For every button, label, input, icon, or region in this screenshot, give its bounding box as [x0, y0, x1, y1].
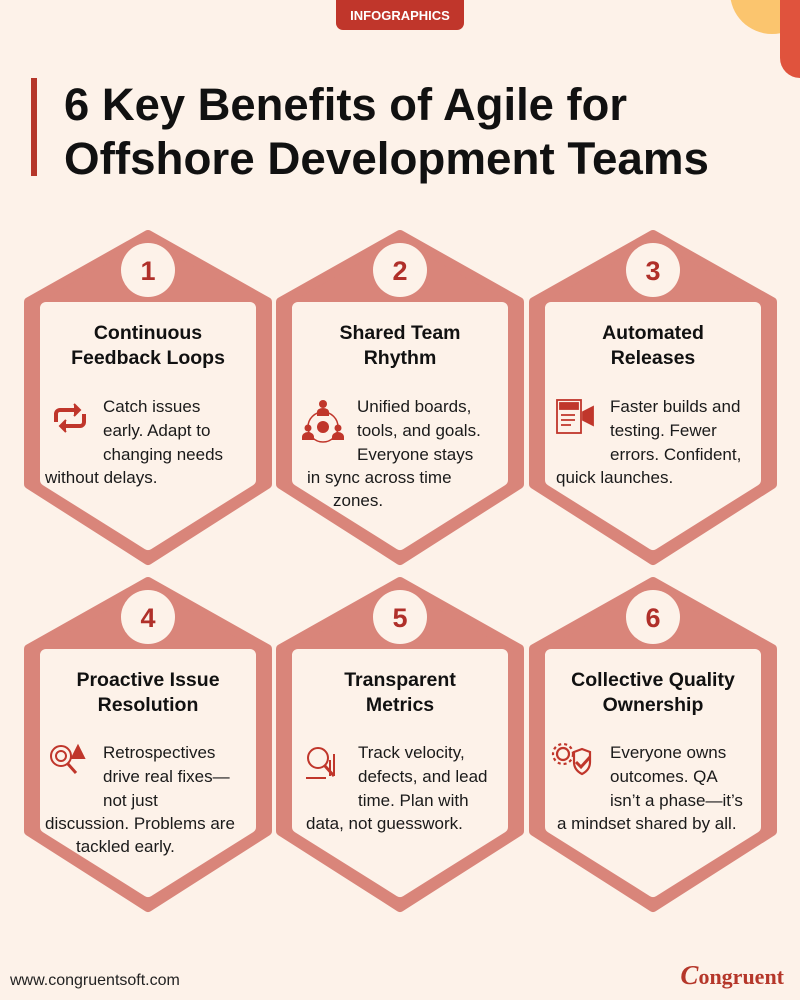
- card 2: shared team rhythm: 2: [392, 256, 408, 286]
- card 5: transparent metrics: [281, 582, 519, 907]
- card 6: collective quality ownership: a mindset shared by all.: [557, 814, 737, 833]
- card 3: automated releases: errors. Confident,: [610, 445, 741, 464]
- card 6: collective quality ownership: [534, 582, 772, 907]
- title: Offshore Development Teams: [64, 133, 709, 184]
- card 3: automated releases: Releases: [611, 347, 695, 369]
- icon: loop arrows: [56, 404, 84, 432]
- card 2: shared team rhythm: Rhythm: [364, 347, 436, 369]
- card 1: continuous feedback loops: 1: [140, 256, 156, 286]
- card 4: proactive issue resolution: Retrospectives: [103, 743, 215, 762]
- icon: team: [302, 400, 344, 442]
- card 4: proactive issue resolution: tackled early.: [76, 837, 175, 856]
- card 3: automated releases: [534, 235, 772, 560]
- card 3: automated releases: 3: [645, 256, 661, 286]
- card 4: proactive issue resolution: Proactive Issue: [76, 669, 220, 691]
- card 5: transparent metrics: time. Plan with: [358, 791, 469, 810]
- card 4: proactive issue resolution: 4: [140, 603, 156, 633]
- card 4: proactive issue resolution: discussion. Problems are: [45, 814, 235, 833]
- card 3: automated releases: Faster builds and: [610, 397, 740, 416]
- card 5: transparent metrics: 5: [392, 603, 408, 633]
- card 1: continuous feedback loops: early. Adapt to: [103, 421, 210, 440]
- footer: website: www.congruentsoft.com: [9, 972, 180, 989]
- card 2: shared team rhythm: Everyone stays: [357, 445, 473, 464]
- icon: chart magnifier: [306, 748, 334, 778]
- card 1: continuous feedback loops: Continuous: [94, 322, 202, 344]
- card 5: transparent metrics: defects, and lead: [358, 767, 487, 786]
- card 5: transparent metrics: Transparent: [344, 669, 456, 691]
- title: [31, 78, 709, 184]
- card 4: proactive issue resolution: Resolution: [98, 694, 198, 716]
- card 5: transparent metrics: data, not guesswork.: [306, 814, 463, 833]
- card 1: continuous feedback loops: Feedback Loops: [71, 347, 225, 369]
- card 6: collective quality ownership: Ownership: [603, 694, 703, 716]
- card 5: transparent metrics: Track velocity,: [358, 743, 465, 762]
- card 6: collective quality ownership: outcomes. QA: [610, 767, 718, 786]
- card 2: shared team rhythm: tools, and goals.: [357, 421, 481, 440]
- card 6: collective quality ownership: isn’t a phase—it’s: [610, 791, 743, 810]
- card 2: shared team rhythm: Unified boards,: [357, 397, 471, 416]
- card 1: continuous feedback loops: without delays.: [44, 468, 157, 487]
- card 6: collective quality ownership: Collective Quality: [571, 669, 735, 691]
- card 3: automated releases: quick launches.: [556, 468, 673, 487]
- icon: gear with shield check: [553, 744, 590, 774]
- card 5: transparent metrics: Metrics: [366, 694, 434, 716]
- card 4: proactive issue resolution: not just: [103, 791, 158, 810]
- card 2: shared team rhythm: zones.: [333, 491, 383, 510]
- card 6: collective quality ownership: Everyone owns: [610, 743, 726, 762]
- card 2: shared team rhythm: in sync across time: [307, 468, 452, 487]
- card 3: automated releases: testing. Fewer: [610, 421, 717, 440]
- card 1: continuous feedback loops: Catch issues: [103, 397, 200, 416]
- card 2: shared team rhythm: [281, 235, 519, 560]
- badge: infographics: INFOGRAPHICS: [350, 8, 450, 23]
- footer: logo: Congruent: [680, 960, 785, 990]
- icon: release document with megaphone: [557, 400, 593, 433]
- card 4: proactive issue resolution: [29, 582, 267, 907]
- card 6: collective quality ownership: 6: [645, 603, 661, 633]
- card 1: continuous feedback loops: [29, 235, 267, 560]
- card 3: automated releases: Automated: [602, 322, 704, 344]
- card 1: continuous feedback loops: changing needs: [103, 445, 223, 464]
- decoration: corner shapes: [730, 0, 800, 78]
- card 4: proactive issue resolution: drive real fixes—: [103, 767, 230, 786]
- title: 6 Key Benefits of Agile for: [64, 79, 627, 130]
- badge: infographics: [336, 0, 464, 30]
- icon: magnifier with alert: [51, 746, 84, 773]
- card 2: shared team rhythm: Shared Team: [339, 322, 461, 344]
